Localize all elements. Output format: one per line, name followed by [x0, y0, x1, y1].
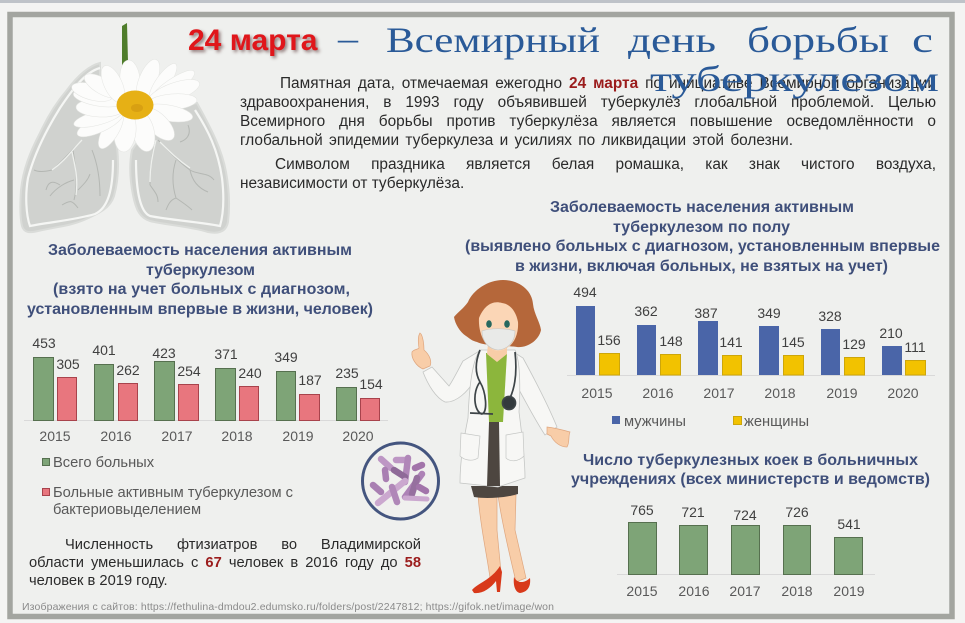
- heading: left chart: [27, 242, 373, 318]
- title date: 24 марта: [188, 24, 318, 57]
- left lung: [20, 63, 118, 232]
- value labels: 141: [719, 334, 743, 350]
- coat: [460, 350, 525, 487]
- bar chart: patients by sex: [567, 284, 935, 401]
- title text: Всемирный: [386, 20, 600, 60]
- eyes: [486, 320, 510, 328]
- stethoscope: [470, 350, 516, 414]
- year labels: [626, 583, 865, 599]
- value labels: 721: [681, 504, 705, 520]
- heading: sex chart: [465, 199, 940, 275]
- value labels: 111: [904, 339, 926, 355]
- heading: hospital beds chart: Число туберкулезных коек в больничных: [583, 452, 918, 469]
- year labels: 2015: [39, 428, 71, 444]
- heading: left chart: туберкулезом: [146, 262, 255, 279]
- value labels: 187: [298, 372, 322, 388]
- year labels: 2017: [729, 583, 761, 599]
- title text: туберкулезом: [650, 59, 939, 99]
- year labels: 2018: [781, 583, 813, 599]
- heading: sex chart: в жизни, включая больных, не взятых на учет): [515, 258, 888, 275]
- year labels: [39, 428, 374, 444]
- value labels: 765: [630, 502, 654, 518]
- value labels: 148: [659, 333, 683, 349]
- hair: [454, 280, 541, 347]
- value labels: 362: [634, 303, 658, 319]
- daisy centre: [116, 90, 154, 120]
- title text: день: [628, 20, 716, 60]
- bar chart: total vs bacterial patients: [24, 335, 388, 444]
- value labels: 349: [274, 349, 298, 365]
- image credits: Изображения с сайтов: https://fethulina-dmdou2.edumsko.ru/folders/post/2247812; https://gifok.net/image/won: [22, 601, 554, 613]
- bars: [567, 306, 935, 376]
- legs: [478, 495, 526, 582]
- heading: sex chart: (выявлено больных с диагнозом, установленным впервые: [465, 238, 940, 255]
- left sleeve: [423, 350, 481, 402]
- heading: left chart: Заболеваемость населения активным: [48, 242, 352, 259]
- year labels: 2019: [833, 583, 865, 599]
- stem: [122, 23, 128, 76]
- year labels: 2020: [887, 385, 919, 401]
- title text: –: [337, 18, 359, 58]
- shoes: [472, 566, 530, 593]
- heading: hospital beds chart: учреждениях (всех министерств и ведомств): [571, 471, 930, 488]
- title text: [337, 18, 939, 99]
- title: [188, 18, 939, 99]
- text block: intro paragraph: Всемирного дня борьбы против туберкулёза является повышение осведомлённости о: [240, 113, 936, 130]
- value labels: 210: [879, 325, 903, 341]
- value labels: [32, 335, 383, 392]
- heading: left chart: (взято на учет больных с диагнозом,: [53, 281, 350, 298]
- value labels: 387: [694, 305, 718, 321]
- text block: intro paragraph: [240, 75, 936, 192]
- year labels: 2016: [642, 385, 674, 401]
- value labels: 154: [359, 376, 383, 392]
- illustration: doctor: [412, 280, 570, 593]
- value labels: [630, 502, 861, 532]
- heading: left chart: установленным впервые в жизни, человек): [27, 301, 373, 318]
- value labels: 349: [757, 305, 781, 321]
- bars: [24, 358, 388, 420]
- value labels: 240: [238, 365, 262, 381]
- year labels: 2015: [581, 385, 613, 401]
- year labels: 2017: [161, 428, 193, 444]
- value labels: 145: [781, 334, 805, 350]
- value labels: 494: [573, 284, 597, 300]
- text block: intro paragraph: здравоохранения, в 1993 году объявившей туберкулёз глобальной проблемой. Целью: [240, 94, 936, 111]
- value labels: 254: [177, 363, 201, 379]
- value labels: 726: [785, 504, 809, 520]
- value labels: 541: [837, 516, 861, 532]
- text block: intro paragraph: глобальной эпидемии туберкулеза и усилиях по ликвидации этой болезни.: [240, 132, 793, 149]
- year labels: 2015: [626, 583, 658, 599]
- year labels: 2016: [678, 583, 710, 599]
- year labels: 2020: [342, 428, 374, 444]
- year labels: 2018: [764, 385, 796, 401]
- legend: left chart: Всего больных: [53, 455, 155, 471]
- text block: phthisiatricians: человек в 2019 году.: [29, 573, 168, 589]
- heading: sex chart: туберкулезом по полу: [613, 219, 790, 236]
- value labels: 401: [92, 342, 116, 358]
- legend: sex chart: мужчины: [624, 414, 686, 430]
- skirt: [471, 486, 518, 498]
- legend: sex chart: женщины: [744, 414, 809, 430]
- year labels: 2019: [282, 428, 314, 444]
- neck: [487, 344, 507, 362]
- mask: [482, 329, 515, 350]
- bar chart: hospital beds: [617, 502, 875, 599]
- text block: intro paragraph: Символом праздника является белая ромашка, как знак чистого воздуха,: [275, 156, 936, 173]
- legend: sex chart: [612, 414, 809, 430]
- legend: left chart: бактериовыделением: [53, 502, 201, 518]
- shirt: [486, 353, 507, 422]
- face: [479, 302, 518, 351]
- right hand: [547, 427, 570, 447]
- daisy petals: [70, 56, 202, 154]
- year labels: 2019: [826, 385, 858, 401]
- icon: bacteria in circle: [362, 443, 438, 519]
- text block: intro paragraph: независимости от туберкулёза.: [240, 175, 464, 192]
- text block: intro paragraph: Памятная дата, отмечаемая ежегодно 24 марта по инициативе Всемирной организации: [280, 75, 936, 92]
- dark dress strip: [487, 422, 500, 486]
- text block: phthisiatricians: области уменьшилась с 67 человек в 2016 году до 58: [29, 555, 421, 571]
- year labels: 2016: [100, 428, 132, 444]
- year labels: [581, 385, 919, 401]
- legend: left chart: Больные активным туберкулезом с: [53, 485, 293, 501]
- legend: left chart: [42, 455, 293, 518]
- icon: lungs with daisy: [20, 23, 229, 233]
- text block: phthisiatricians: [29, 537, 421, 589]
- coat pockets: [460, 432, 524, 461]
- left hand: [412, 333, 431, 369]
- heading: hospital beds chart: [571, 452, 930, 488]
- value labels: [573, 284, 926, 355]
- bars: [617, 522, 875, 574]
- title text: с: [912, 20, 933, 60]
- right sleeve: [512, 351, 557, 435]
- value labels: 129: [842, 336, 866, 352]
- value labels: 724: [733, 507, 757, 523]
- value labels: 235: [335, 365, 359, 381]
- value labels: 328: [818, 308, 842, 324]
- value labels: 371: [214, 346, 238, 362]
- year labels: 2018: [221, 428, 253, 444]
- title text: борьбы: [747, 20, 889, 60]
- right lung: [130, 103, 229, 233]
- text block: phthisiatricians: Численность фтизиатров во Владимирской: [65, 537, 421, 553]
- value labels: 156: [597, 332, 621, 348]
- heading: sex chart: Заболеваемость населения активным: [550, 199, 854, 216]
- value labels: 305: [56, 356, 80, 372]
- value labels: 423: [152, 345, 176, 361]
- value labels: 453: [32, 335, 56, 351]
- year labels: 2017: [703, 385, 735, 401]
- value labels: 262: [116, 362, 140, 378]
